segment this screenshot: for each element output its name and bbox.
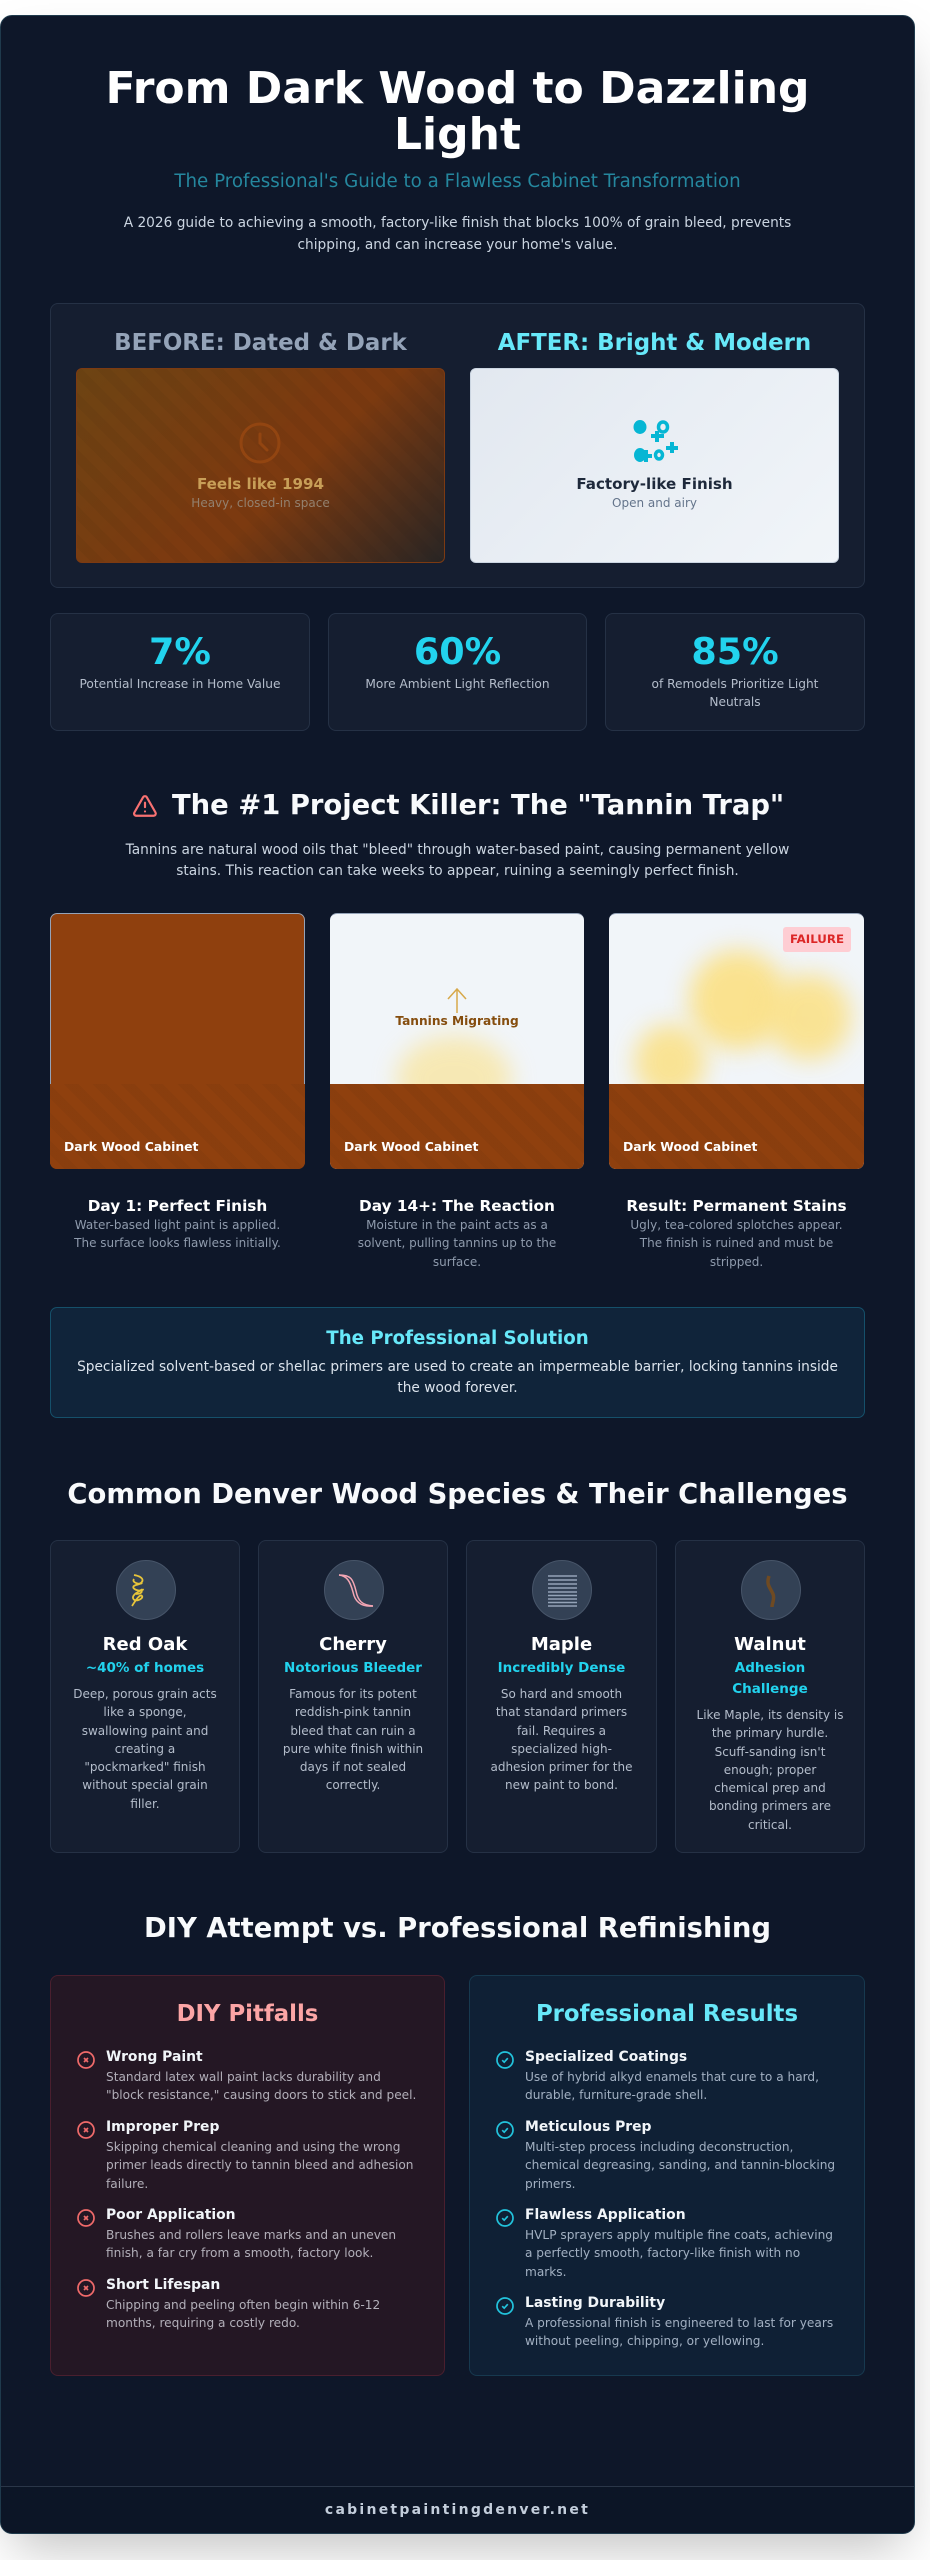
description: chemical prep and — [714, 1781, 826, 1795]
icon: check — [496, 2209, 514, 2227]
description: correctly. — [326, 1778, 380, 1792]
description: Like Maple, its density is — [697, 1708, 843, 1722]
title — [105, 63, 810, 160]
item: wrong paint: Standard latex wall paint lacks durability and — [106, 2070, 381, 2084]
stat: 60%: More Ambient Light Reflection — [365, 677, 550, 691]
item: lasting durability: Lasting Durability — [525, 2295, 665, 2311]
wood layer — [50, 1084, 305, 1169]
caption: day 1: The surface looks flawless initially. — [74, 1236, 281, 1250]
stat: 85% — [605, 613, 865, 731]
item: wrong paint: "block resistance," causing doors to stick and peel. — [106, 2088, 416, 2102]
item: short lifespan: months, requiring a costly redo. — [106, 2316, 300, 2330]
description — [283, 1687, 423, 1792]
item: specialized coatings — [496, 2049, 819, 2102]
item: short lifespan: Short Lifespan — [106, 2277, 220, 2293]
panel heading: DIY Pitfalls — [177, 2001, 318, 2027]
description: "pockmarked" finish — [84, 1760, 206, 1774]
arrow up — [448, 988, 466, 1013]
icon: warning — [133, 795, 157, 817]
wood label: Dark Wood Cabinet — [344, 1139, 478, 1154]
wood layer — [609, 1084, 864, 1169]
tag: Adhesion — [735, 1660, 805, 1676]
item: specialized coatings: Specialized Coatings — [525, 2049, 687, 2065]
description: swallowing paint and — [82, 1724, 208, 1738]
item: improper prep: primer leads directly to tannin bleed and adhesion — [106, 2158, 414, 2172]
description: the primary hurdle. — [712, 1726, 828, 1740]
failure badge — [783, 927, 851, 952]
item: poor application: finish, a far cry from a smooth, factory look. — [106, 2246, 373, 2260]
stain two — [767, 974, 851, 1060]
description: Scuff-sanding isn't — [715, 1745, 825, 1759]
description: pure white finish within — [283, 1742, 423, 1756]
caption: result — [626, 1197, 847, 1269]
item: lasting durability: A professional finish is engineered to last for years — [525, 2316, 833, 2330]
item: improper prep — [77, 2119, 414, 2191]
item: wrong paint: Wrong Paint — [106, 2049, 203, 2065]
description — [490, 1687, 633, 1792]
description: days if not sealed — [300, 1760, 406, 1774]
before caption: Feels like 1994 — [197, 475, 324, 493]
card: day 1 — [50, 913, 305, 1169]
stat: 60% — [328, 613, 587, 731]
description: adhesion primer for the — [490, 1760, 633, 1774]
description: filler. — [130, 1797, 160, 1811]
panel: before and after — [50, 303, 865, 588]
heading: wood species: Common Denver Wood Species & Their Challenges — [67, 1479, 848, 1510]
item: improper prep: failure. — [106, 2177, 148, 2191]
footer — [1, 2486, 914, 2533]
heading: before: BEFORE: Dated & Dark — [114, 330, 407, 356]
caption: day 1: Water-based light paint is applied. — [75, 1218, 280, 1232]
species card: red oak — [50, 1540, 240, 1853]
name: Maple — [531, 1634, 592, 1655]
item: flawless application: a perfectly smooth, factory-like finish with no — [525, 2246, 800, 2260]
item: flawless application — [496, 2207, 833, 2279]
item: lasting durability: without peeling, chipping, or yellowing. — [525, 2334, 764, 2348]
item: flawless application: Flawless Application — [525, 2207, 686, 2223]
description: bonding primers are — [709, 1799, 831, 1813]
icon: sparkles — [634, 420, 678, 462]
stat: 7% — [50, 613, 310, 731]
panel: diy pitfalls — [50, 1975, 445, 2376]
tag: Challenge — [732, 1681, 808, 1697]
caption: day 1: Day 1: Perfect Finish — [88, 1197, 267, 1215]
caption: result: stripped. — [710, 1255, 763, 1269]
description: Deep, porous grain acts — [73, 1687, 217, 1701]
stain one — [689, 950, 787, 1050]
after caption: Factory-like Finish — [576, 475, 733, 493]
item: specialized coatings: Use of hybrid alkyd enamels that cure to a hard, — [525, 2070, 819, 2084]
caption: day 14 — [358, 1197, 556, 1269]
item: flawless application: HVLP sprayers apply multiple fine coats, achieving — [525, 2228, 833, 2242]
icon: clock — [240, 422, 280, 464]
icon: x — [77, 2209, 95, 2227]
caption: result: Result: Permanent Stains — [626, 1197, 847, 1215]
icon: x — [77, 2051, 95, 2069]
species card: walnut — [675, 1540, 865, 1853]
species card: maple — [466, 1540, 657, 1853]
item: short lifespan: Chipping and peeling often begin within 6-12 — [106, 2298, 380, 2312]
subtitle: The Professional's Guide to a Flawless Cabinet Transformation — [174, 171, 741, 192]
stat: 7%: 7% — [149, 630, 211, 673]
caption: day 14: Day 14+: The Reaction — [359, 1197, 555, 1215]
before image — [76, 368, 445, 563]
after sub caption: Open and airy — [612, 496, 697, 510]
stat: 85%: 85% — [691, 630, 779, 673]
stat: 7%: Potential Increase in Home Value — [79, 677, 281, 691]
description: new paint to bond. — [505, 1778, 618, 1792]
species card: cherry — [258, 1540, 448, 1853]
callout text: Specialized solvent-based or shellac primers are used to create an impermeable barrier, locking tannins inside — [77, 1359, 838, 1375]
icon: oak grain — [116, 1560, 176, 1620]
caption: day 1 — [74, 1197, 281, 1250]
icon: walnut grain — [741, 1560, 801, 1620]
item: meticulous prep: primers. — [525, 2177, 576, 2191]
tag: ~40% of homes — [86, 1660, 204, 1676]
paint layer — [50, 913, 305, 1084]
description — [73, 1687, 217, 1811]
tag: Notorious Bleeder — [284, 1660, 422, 1676]
wood label: Dark Wood Cabinet — [64, 1139, 198, 1154]
caption: result: Ugly, tea-colored splotches appear. — [630, 1218, 843, 1232]
description: enough; proper — [724, 1763, 816, 1777]
name: Walnut — [734, 1634, 806, 1655]
wood layer — [330, 1084, 584, 1169]
icon: check — [496, 2297, 514, 2315]
icon: cherry grain — [324, 1560, 384, 1620]
tannin text — [126, 842, 789, 879]
description — [697, 1708, 843, 1832]
caption: result: The finish is ruined and must be — [640, 1236, 833, 1250]
name: Red Oak — [103, 1634, 187, 1655]
migrating label: Tannins Migrating — [395, 1014, 519, 1028]
failure badge: FAILURE — [790, 932, 844, 946]
tannin text: stains. This reaction can take weeks to appear, ruining a seemingly perfect finish. — [176, 863, 739, 879]
item: meticulous prep: Meticulous Prep — [525, 2119, 651, 2135]
stat: 85%: of Remodels Prioritize Light Neutrals — [652, 677, 818, 709]
icon: x — [77, 2279, 95, 2297]
callout: professional solution — [50, 1307, 865, 1418]
item: meticulous prep: Multi-step process including deconstruction, — [525, 2140, 793, 2154]
item: wrong paint — [77, 2049, 416, 2102]
description: bleed that can ruin a — [290, 1724, 416, 1738]
footer: cabinetpaintingdenver.net — [325, 2502, 590, 2518]
item: short lifespan — [77, 2277, 380, 2330]
before sub caption: Heavy, closed-in space — [191, 496, 330, 510]
panel heading: Professional Results — [536, 2001, 798, 2027]
item: improper prep: Skipping chemical cleaning and using the wrong — [106, 2140, 400, 2154]
item: improper prep: Improper Prep — [106, 2119, 219, 2135]
icon: check — [496, 2051, 514, 2069]
description: Famous for its potent — [289, 1687, 417, 1701]
callout text: the wood forever. — [397, 1380, 518, 1396]
after image — [470, 368, 839, 563]
intro text: chipping, and can increase your home's value. — [298, 236, 617, 252]
icon: x — [77, 2121, 95, 2139]
intro text: A 2026 guide to achieving a smooth, factory-like finish that blocks 100% of grain bleed, prevents — [124, 215, 791, 231]
item: meticulous prep: chemical degreasing, sanding, and tannin-blocking — [525, 2158, 835, 2172]
stat: 60%: 60% — [414, 630, 501, 673]
callout text — [77, 1359, 838, 1396]
description: reddish-pink tannin — [295, 1705, 411, 1719]
card: result — [609, 913, 864, 1169]
tag: Incredibly Dense — [498, 1660, 625, 1676]
heading: diy vs professional: DIY Attempt vs. Professional Refinishing — [144, 1913, 771, 1944]
tag — [732, 1660, 808, 1697]
item: flawless application: marks. — [525, 2265, 566, 2279]
description: without special grain — [82, 1778, 208, 1792]
description: specialized high- — [511, 1742, 612, 1756]
description: critical. — [748, 1818, 792, 1832]
description: that standard primers — [496, 1705, 627, 1719]
description: So hard and smooth — [501, 1687, 622, 1701]
caption: day 14: surface. — [433, 1255, 481, 1269]
title: From Dark Wood to Dazzling — [105, 63, 810, 114]
panel: professional results — [469, 1975, 865, 2376]
icon: check — [496, 2121, 514, 2139]
item: meticulous prep — [496, 2119, 835, 2191]
icon: maple grain — [532, 1560, 592, 1620]
title: Light — [394, 109, 521, 160]
callout heading: The Professional Solution — [326, 1328, 589, 1349]
intro text — [124, 215, 791, 252]
heading: after: AFTER: Bright & Modern — [498, 330, 811, 356]
caption: day 14: Moisture in the paint acts as a — [366, 1218, 548, 1232]
item: poor application: Poor Application — [106, 2207, 236, 2223]
name: Cherry — [319, 1634, 387, 1655]
tannin text: Tannins are natural wood oils that "bleed" through water-based paint, causing permanent yellow — [126, 842, 789, 858]
item: poor application: Brushes and rollers leave marks and an uneven — [106, 2228, 396, 2242]
description: like a sponge, — [103, 1705, 187, 1719]
item: poor application — [77, 2207, 396, 2260]
item: specialized coatings: durable, furniture-grade shell. — [525, 2088, 707, 2102]
stain three — [634, 1024, 706, 1100]
wood label: Dark Wood Cabinet — [623, 1139, 757, 1154]
heading: tannin trap: The #1 Project Killer: The "Tannin Trap" — [172, 790, 784, 821]
description: creating a — [115, 1742, 175, 1756]
description: fail. Requires a — [517, 1724, 606, 1738]
item: lasting durability — [496, 2295, 833, 2348]
caption: day 14: solvent, pulling tannins up to the — [358, 1236, 556, 1250]
card: day 14 — [330, 913, 584, 1169]
tannin stain — [396, 1036, 512, 1122]
